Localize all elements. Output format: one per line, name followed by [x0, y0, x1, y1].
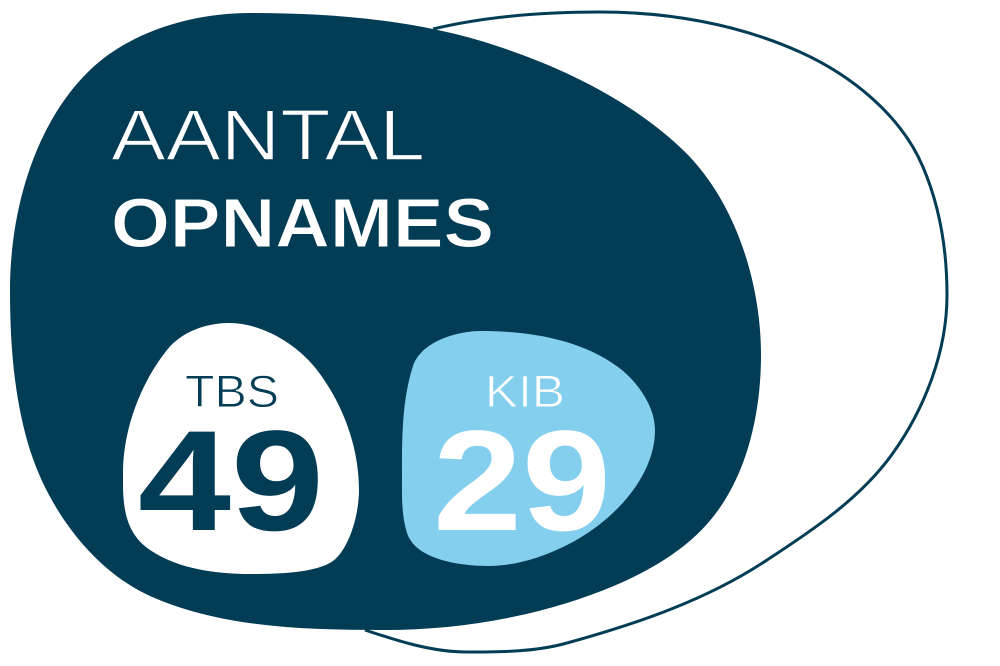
KIB badge: [402, 331, 655, 566]
TBS blob: [123, 323, 359, 574]
outline blob: [365, 12, 947, 652]
KIB blob: [402, 331, 655, 566]
dark blob: [10, 13, 761, 630]
KIB label: KIB: [485, 366, 565, 417]
KIB value: 29: [433, 402, 611, 561]
title line: AANTAL: AANTAL: [111, 96, 425, 176]
title line: OPNAMES: OPNAMES: [111, 184, 494, 262]
title: [111, 96, 494, 262]
TBS badge: [123, 323, 359, 574]
TBS label: TBS: [185, 366, 279, 417]
TBS value: 49: [138, 402, 324, 561]
